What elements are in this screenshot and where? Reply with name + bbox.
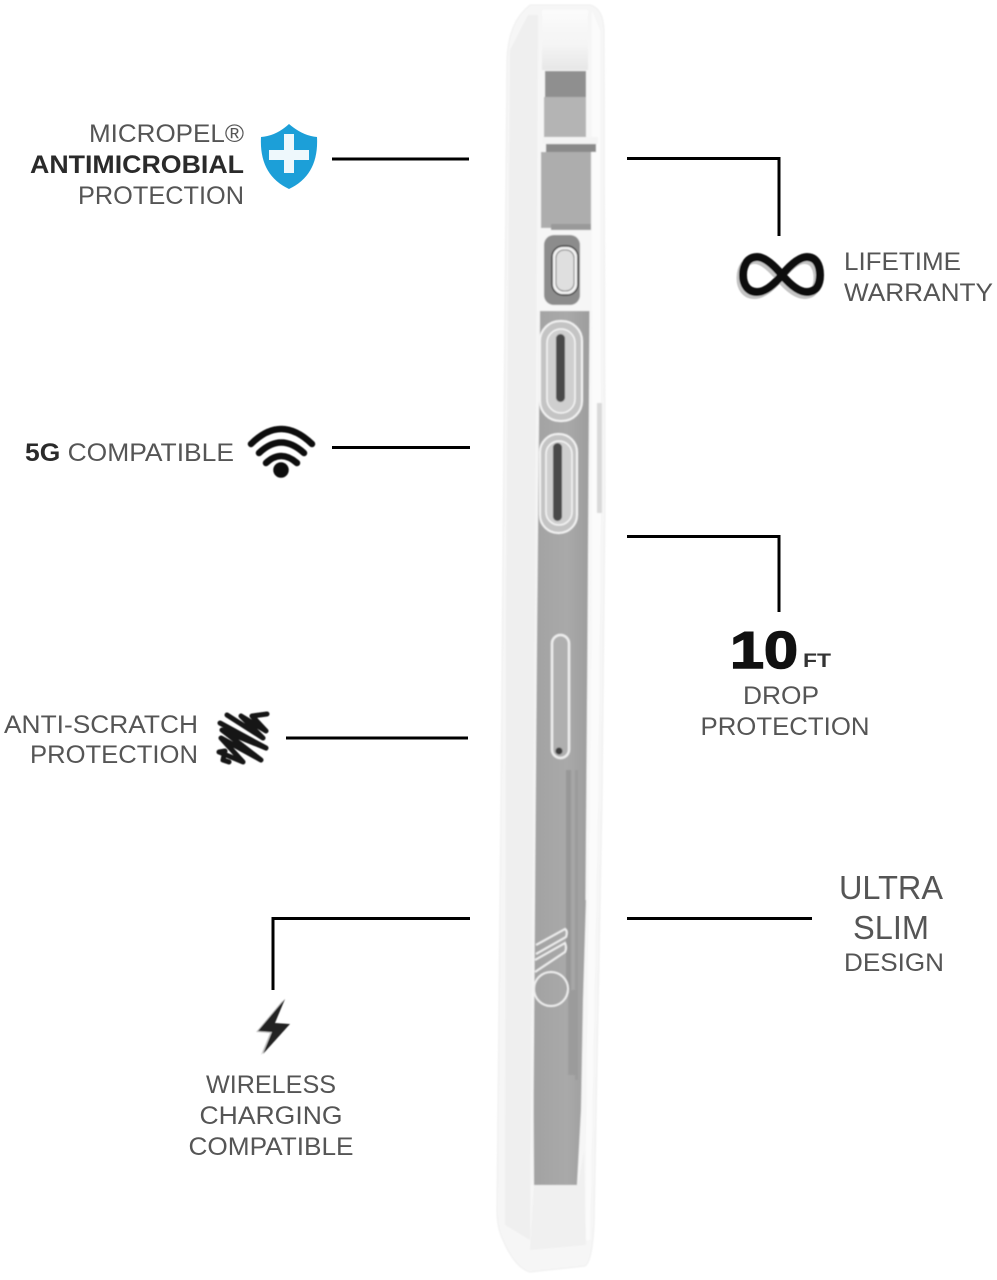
callout: 10 ft drop protection: PROTECTION [700, 713, 870, 741]
top inner clear block [542, 10, 588, 70]
connector line [627, 536, 779, 612]
power button [552, 635, 569, 758]
callout: 10 ft drop protection [627, 536, 870, 741]
bottom clear block [530, 1150, 586, 1250]
icon: scratch scribble [219, 714, 267, 762]
white highlight stripe [542, 137, 598, 144]
callout: microbial: PROTECTION [78, 182, 244, 210]
icon: blue shield with cross [261, 124, 317, 189]
connector line [273, 918, 470, 990]
callout: lifetime warranty [627, 158, 993, 307]
drop height figure: FT [803, 651, 831, 672]
callout: lifetime warranty: LIFETIME [844, 248, 961, 276]
icon: lightning bolt [256, 999, 290, 1055]
icon: infinity [740, 257, 820, 295]
callout: microbial: ANTIMICROBIAL [30, 151, 244, 179]
volume down button [540, 434, 577, 533]
callout: wireless charging: COMPATIBLE [188, 1133, 354, 1161]
connector line [627, 158, 779, 236]
case right edge [585, 10, 601, 1240]
callout: anti-scratch: PROTECTION [30, 741, 198, 769]
volume up button [540, 321, 582, 421]
side button right bump [597, 403, 602, 513]
callout: wireless charging: WIRELESS [206, 1071, 336, 1099]
callout: ultra slim design: DESIGN [844, 949, 944, 977]
middle window [541, 152, 591, 228]
connector line [286, 736, 468, 740]
white band edges [532, 311, 539, 1185]
dark top window [545, 71, 586, 97]
connector line [332, 158, 469, 160]
callout: ultra slim design: SLIM [853, 909, 929, 946]
callout: 10 ft drop protection: DROP [743, 682, 819, 710]
drop height figure: 10 [730, 622, 798, 680]
mute switch port [544, 235, 580, 305]
callout: wireless charging [188, 918, 470, 1161]
icon: wifi signal [251, 429, 312, 474]
main grey band [533, 311, 590, 1185]
upper window [544, 97, 586, 137]
case outer shell [497, 5, 605, 1272]
stripe shadow [546, 144, 596, 152]
callout: ultra slim design [627, 869, 944, 977]
phone in clear case, side view [497, 5, 605, 1272]
case brand logo [534, 929, 568, 1006]
callout: microbial [30, 120, 469, 210]
callout: anti-scratch [4, 711, 468, 769]
connector line [332, 446, 470, 449]
callout: microbial: MICROPEL® [89, 120, 245, 148]
case left face [505, 15, 538, 1240]
callout: 5G compatible [25, 429, 470, 474]
drop height figure [730, 622, 831, 680]
callout: 5G compatible: 5G COMPATIBLE [25, 439, 234, 467]
connector line [627, 917, 812, 920]
callout: lifetime warranty: WARRANTY [844, 279, 993, 307]
inner vertical streaks [566, 770, 571, 990]
callout: ultra slim design: ULTRA [839, 869, 943, 906]
callout: anti-scratch: ANTI-SCRATCH [4, 711, 198, 739]
callout: wireless charging: CHARGING [200, 1102, 342, 1130]
